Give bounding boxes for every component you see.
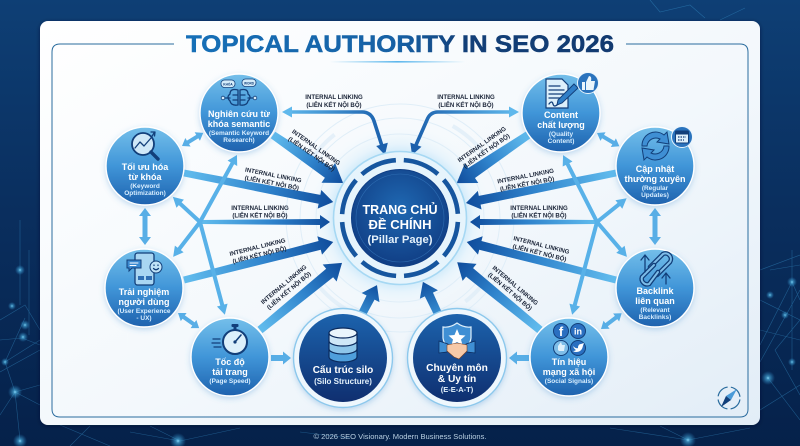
curved arrow: semantic research and pillar [282, 106, 388, 155]
node: regular updates: thường xuyên [625, 174, 685, 184]
node: relevant backlinks: (Relevant [640, 307, 670, 314]
label: top right [437, 94, 495, 109]
title underline [330, 61, 465, 63]
label: UX arrow: (LIÊN KẾT NỘI BỘ) [232, 244, 287, 265]
label: backlink arrow: (LIÊN KẾT NỘI BỘ) [512, 242, 567, 263]
node: page speed: (Page Speed) [209, 378, 251, 385]
node: semantic keyword research: Nghiên cứu từ [208, 109, 270, 119]
label: top right: (LIÊN KẾT NỘI BỘ) [438, 101, 494, 109]
footer copyright: © 2026 SEO Visionary. Modern Business Solutions. [314, 432, 486, 441]
node: relevant backlinks: Backlink [636, 286, 674, 296]
internal linking labels [229, 94, 570, 313]
arrow: regular updates to pillar [464, 164, 618, 212]
arrow: silo to pillar [351, 281, 386, 323]
icon: document and pen [546, 79, 578, 108]
node: user experience [105, 249, 183, 327]
pillar label: ĐỀ CHÍNH [368, 217, 432, 232]
label: updates arrow [497, 168, 556, 193]
node: silo structure: (Silo Structure) [314, 377, 372, 386]
node: social signals: (Social Signals) [545, 378, 593, 385]
node: social signals [530, 318, 608, 396]
arrow: semantic research to pillar [266, 125, 350, 193]
node: keyword optimization: (Keyword [130, 183, 160, 190]
title: TOPICAL AUTHORITY IN SEO 2026 [186, 31, 614, 58]
label: semantic arrow: INTERNAL LINKING [290, 128, 342, 167]
label: right horizontal: INTERNAL LINKING [510, 205, 568, 212]
label: top left: (LIÊN KẾT NỘI BỘ) [306, 101, 362, 109]
node: quality content: (Quality [549, 131, 573, 138]
pillar label [362, 202, 438, 246]
node: expertise and trust: & Uy tín [438, 374, 476, 385]
icon: phone with chat and smiley [127, 253, 162, 285]
node: user experience: (User Experience [117, 308, 171, 315]
node: quality content [522, 72, 600, 152]
node: regular updates: Updates) [641, 192, 669, 199]
label: semantic arrow: (LIÊN KẾT NỘI BỘ) [287, 135, 336, 173]
node: quality content: Content [544, 110, 578, 120]
arrow: E-E-A-T to pillar [414, 278, 449, 322]
node: regular updates: Cập nhật [636, 164, 674, 174]
node: page speed: Tốc độ [215, 357, 245, 367]
double arrows between satellite nodes [139, 129, 661, 364]
icon: brain with speech bubbles: KHÓA [223, 82, 233, 86]
icon: chain link with arrows [641, 253, 671, 284]
label: top left: INTERNAL LINKING [305, 94, 363, 101]
arrow: user experience to pillar [182, 233, 336, 289]
arrow: right hub to pillar [470, 215, 597, 229]
hub arrows right [558, 153, 631, 316]
label: UX arrow [229, 237, 289, 266]
node: user experience: - UX) [136, 315, 152, 322]
node: relevant backlinks: Backlinks) [639, 314, 671, 321]
node: user experience: Trải nghiệm [119, 287, 169, 297]
label: left horizontal: INTERNAL LINKING [231, 205, 289, 212]
node: page speed [191, 318, 269, 396]
node: silo structure [294, 308, 392, 408]
label: social arrow: INTERNAL LINKING [491, 265, 539, 307]
node: semantic keyword research: Research) [223, 137, 255, 144]
pillar page hub [334, 152, 466, 284]
label: left horizontal [231, 205, 289, 220]
node: relevant backlinks: liên quan [635, 296, 675, 306]
label: social arrow: (LIÊN KẾT NỘI BỘ) [486, 271, 534, 312]
hub arrows left [169, 152, 242, 316]
label: speed arrow: (LIÊN KẾT NỘI BỘ) [265, 270, 313, 311]
label: right horizontal: (LIÊN KẾT NỘI BỘ) [511, 212, 567, 220]
label: UX arrow: INTERNAL LINKING [229, 237, 287, 258]
label: updates arrow: (LIÊN KẾT NỘI BỘ) [499, 175, 555, 193]
icon: stopwatch [212, 324, 247, 354]
node: semantic keyword research: (Semantic Keyword [209, 130, 269, 137]
icon: database [329, 328, 357, 362]
label: top right: INTERNAL LINKING [437, 94, 495, 101]
arrow: left hub to pillar [200, 215, 330, 229]
node: social signals: mạng xã hội [543, 367, 595, 377]
label: backlink arrow: INTERNAL LINKING [513, 235, 570, 256]
arrow: backlink to pillar [464, 233, 618, 289]
center halo rings [286, 104, 514, 332]
label: right horizontal [510, 205, 568, 220]
segmented ring [342, 160, 458, 276]
icon: brain with speech bubbles: WORD [244, 82, 255, 86]
icon: social badges [554, 324, 586, 356]
label: keyword arrow: (LIÊN KẾT NỘI BỘ) [244, 174, 300, 192]
icon: social badges: in [574, 326, 582, 336]
node: expertise and trust: (E-E-A-T) [441, 385, 474, 394]
icon: brain with speech bubbles [221, 79, 257, 105]
label: speed arrow: INTERNAL LINKING [260, 264, 308, 306]
node: expertise and trust [408, 308, 506, 408]
node: expertise and trust: Chuyên môn [426, 363, 488, 374]
node: quality content: Content) [548, 138, 574, 145]
node: keyword optimization: Optimization) [124, 190, 166, 197]
node: user experience: người dùng [119, 297, 169, 307]
arrow: page speed to pillar [253, 254, 349, 339]
node: semantic keyword research [200, 74, 278, 152]
panel: inner title frame [52, 44, 748, 417]
core disc [352, 170, 448, 266]
node: regular updates [616, 126, 694, 205]
icon: shield and handshake [439, 323, 475, 359]
node: quality content: chất lượng [537, 120, 585, 130]
node: relevant backlinks [616, 249, 694, 327]
curved arrow: quality content and pillar [410, 106, 519, 155]
node: semantic keyword research: khóa semantic [208, 119, 270, 129]
node: social signals: Tín hiệu [552, 357, 586, 367]
node: silo structure: Cấu trúc silo [313, 364, 373, 376]
icon: sync arrows [642, 132, 669, 160]
label: left horizontal: (LIÊN KẾT NỘI BỘ) [232, 212, 288, 220]
icon: compass logo [718, 387, 740, 409]
label: updates arrow: INTERNAL LINKING [497, 168, 555, 185]
label: content arrow: (LIÊN KẾT NỘI BỘ) [462, 132, 511, 170]
node: keyword optimization: Tối ưu hóa [122, 162, 169, 172]
icon: thumbs up badge [578, 72, 598, 94]
pillar label: (Pillar Page) [368, 234, 433, 246]
label: backlink arrow [511, 235, 570, 264]
node: keyword optimization [106, 127, 184, 205]
node: keyword optimization: từ khóa [128, 172, 162, 182]
arrow: keyword optimization to pillar [182, 164, 335, 211]
pillar label: TRANG CHỦ [362, 202, 438, 217]
icon: social badges: f [559, 324, 564, 339]
arrow: quality content to pillar [450, 125, 535, 193]
icon: calendar badge [672, 126, 692, 148]
label: keyword arrow [243, 167, 302, 192]
node: page speed: tải trang [212, 367, 248, 377]
icon: magnifier with chart [132, 132, 158, 159]
arrow: social signals to pillar [450, 254, 547, 339]
arrows to pillar page [182, 125, 618, 339]
label: top left [305, 94, 363, 109]
node: regular updates: (Regular [642, 185, 669, 192]
label: content arrow: INTERNAL LINKING [457, 125, 508, 164]
label: keyword arrow: INTERNAL LINKING [244, 167, 302, 184]
